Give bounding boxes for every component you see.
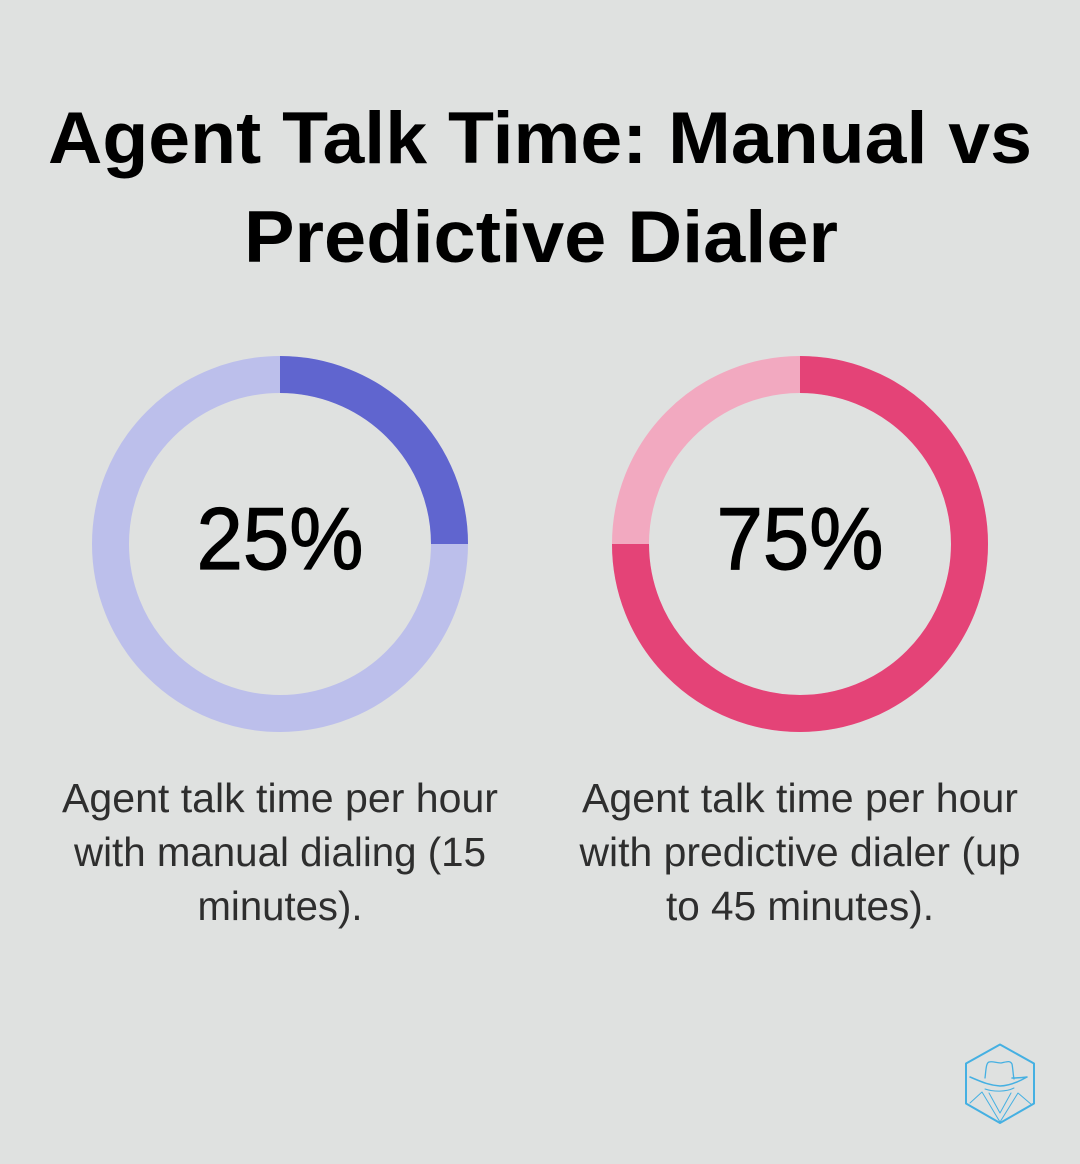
description: predictive dialer: Agent talk time per hour — [582, 775, 1018, 821]
icon: logo hexagon with hat and collar — [966, 1044, 1034, 1123]
donut chart: 75% — [630, 374, 970, 714]
panel: predictive dialer — [579, 374, 1020, 929]
description: predictive dialer: to 45 minutes). — [666, 883, 934, 929]
title — [48, 98, 1032, 278]
panel: manual dialing — [62, 374, 498, 929]
description: manual dialing: minutes). — [198, 883, 362, 929]
donut chart: 25% — [110, 374, 450, 714]
description: manual dialing: with manual dialing (15 — [73, 829, 486, 875]
description: manual dialing — [62, 775, 498, 929]
description: predictive dialer — [579, 775, 1020, 929]
value: 25%: 25% — [196, 489, 364, 588]
description: manual dialing: Agent talk time per hour — [62, 775, 498, 821]
title: Agent Talk Time: Manual vs — [48, 98, 1032, 179]
description: predictive dialer: with predictive dialer (up — [579, 829, 1020, 875]
title: Predictive Dialer — [244, 197, 838, 278]
value: 75%: 75% — [716, 489, 884, 588]
